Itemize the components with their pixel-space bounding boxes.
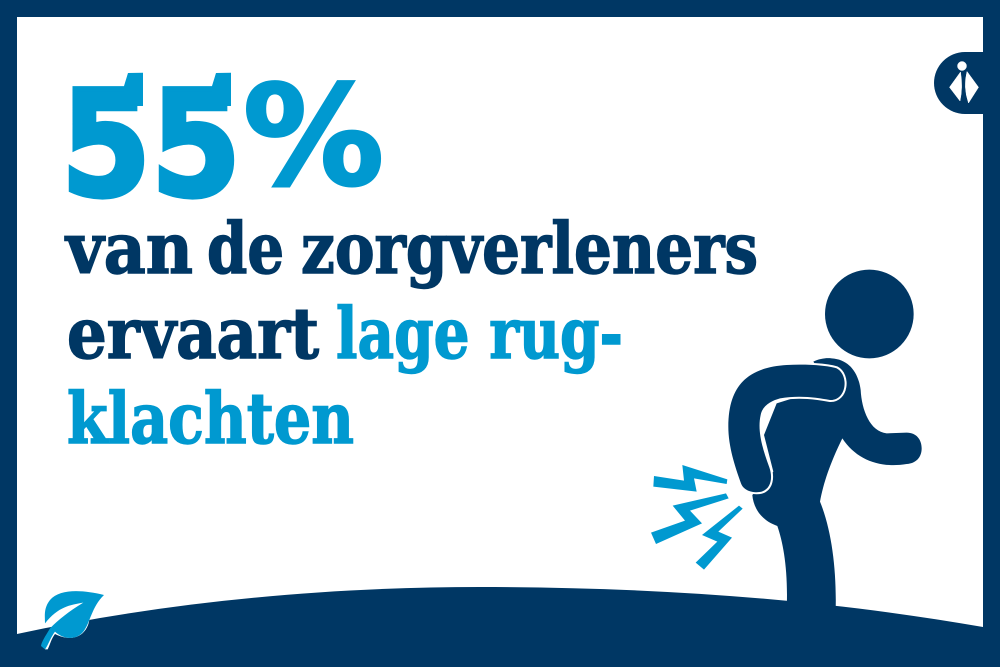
statistic: 55%: 55 [61, 60, 241, 230]
statistic: 55% [61, 56, 384, 230]
torso and legs [752, 358, 922, 610]
heading line 1 [64, 207, 758, 290]
statistic: 55%: % [243, 56, 384, 217]
hill [0, 587, 983, 667]
icon: leaf [41, 591, 104, 649]
icon: person with back pain [651, 270, 922, 610]
heading [64, 207, 758, 460]
pain bolts [651, 465, 743, 570]
heading line 2: lage rug- [336, 292, 623, 375]
heading line 2: ervaart [67, 292, 319, 375]
heading line 1: van [64, 207, 193, 290]
logo badge [934, 52, 983, 114]
head [825, 270, 914, 358]
heading line 1: de [207, 207, 284, 290]
arm on back [728, 365, 845, 492]
heading line 2 [67, 292, 623, 375]
bolt 1 [653, 465, 727, 492]
heading line 3: klachten [67, 377, 354, 460]
bolt 2 [651, 493, 729, 544]
heading line 1: zorgverleners [301, 207, 758, 290]
bolt 3 [696, 506, 743, 570]
